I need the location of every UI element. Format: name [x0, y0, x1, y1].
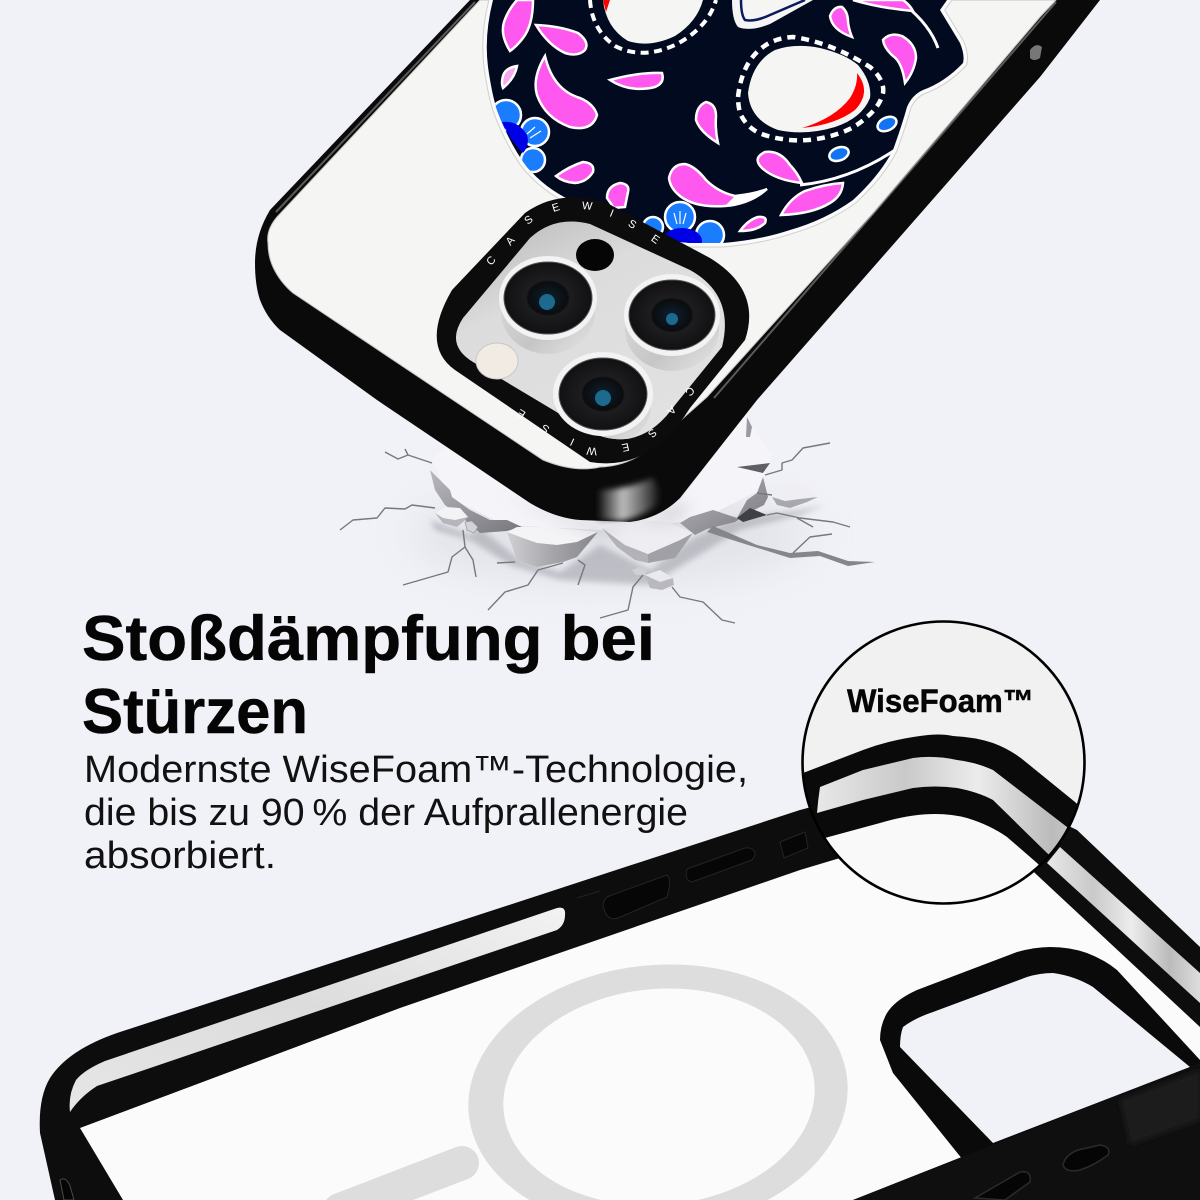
thin cracks: [340, 443, 850, 623]
case black edge: [255, 0, 1100, 522]
rock C: [602, 520, 693, 563]
magnet pill: [340, 1163, 462, 1200]
magnet ring: [457, 949, 859, 1200]
case bottom highlight: [598, 478, 660, 521]
body text: [84, 749, 748, 877]
side buttons: [577, 832, 808, 919]
lighter broken plate: [432, 416, 772, 530]
nose: [732, 0, 813, 29]
skull shape: [487, 0, 964, 243]
right eye: [738, 37, 883, 140]
case interior: [80, 840, 1200, 1200]
heading: Stürzen: [82, 677, 308, 747]
cracked ground impact: [340, 416, 875, 623]
lower left port: [60, 1179, 74, 1200]
side button: [1030, 45, 1042, 60]
body text: absorbiert.: [84, 835, 276, 877]
bottom case: [40, 770, 1200, 1200]
body text: Modernste WiseFoam™-Technologie,: [84, 749, 748, 791]
magnified foam strip: [817, 756, 1068, 854]
rock D: [772, 484, 818, 508]
island plate: [456, 221, 725, 439]
soft ground shading: [410, 487, 810, 583]
top phone with case: [255, 0, 1100, 522]
magnified interior: [826, 814, 1039, 902]
dark triangle chip: [737, 463, 770, 473]
case back panel: [268, 0, 1056, 469]
case frame: [40, 770, 1200, 1200]
bottom right band: [853, 1063, 1200, 1200]
petal tail: [725, 189, 767, 206]
phone contact shadow: [500, 495, 690, 535]
lens fill: [802, 622, 1084, 904]
camera island: [437, 197, 749, 463]
body text: die bis zu 90 % der Aufprallenergie: [84, 792, 688, 834]
right wedge crack: [707, 526, 875, 566]
white contour lines: [800, 5, 938, 185]
left side strip: [70, 908, 565, 1112]
edge highlight: [276, 2, 1056, 398]
left eye: [590, 0, 716, 53]
magnified outer rail: [804, 734, 1077, 865]
microphone hole: [576, 239, 614, 271]
magnified case corner: [804, 734, 1077, 865]
heading: [82, 604, 655, 747]
brand text bottom: CASEWISE: [515, 384, 697, 457]
callout magnifier: [801, 620, 1086, 905]
rock B: [507, 527, 598, 567]
right side strip: [1047, 847, 1200, 1003]
rock shadows: [430, 505, 825, 585]
camera window: [900, 973, 1190, 1143]
ports: [975, 1145, 1109, 1200]
red crescent: [802, 73, 864, 128]
crater stub: [746, 417, 752, 437]
pink petals: [502, 0, 916, 231]
band sheen: [1120, 1070, 1200, 1145]
skull artwork: [487, 0, 964, 254]
lens 1: [499, 256, 597, 340]
left crater band: [430, 470, 522, 533]
dark crater hole: [737, 508, 767, 522]
callout label: WiseFoam™: [847, 683, 1034, 719]
heading: Stoßdämpfung bei: [82, 604, 655, 674]
rock A: [435, 507, 478, 533]
blue dots: [827, 114, 899, 164]
flowers: [491, 100, 724, 254]
lens 3: [553, 352, 653, 436]
camera ring: [880, 947, 1200, 1160]
lens bodies: [502, 311, 719, 440]
flash: [476, 343, 518, 379]
lens 2: [624, 274, 720, 356]
skull outline: [487, 0, 964, 243]
lens outline: [802, 622, 1084, 904]
right crater band: [680, 477, 768, 535]
rock E: [632, 567, 674, 590]
island frame: [437, 197, 749, 463]
brand text top: CASEWISE: [484, 200, 662, 268]
